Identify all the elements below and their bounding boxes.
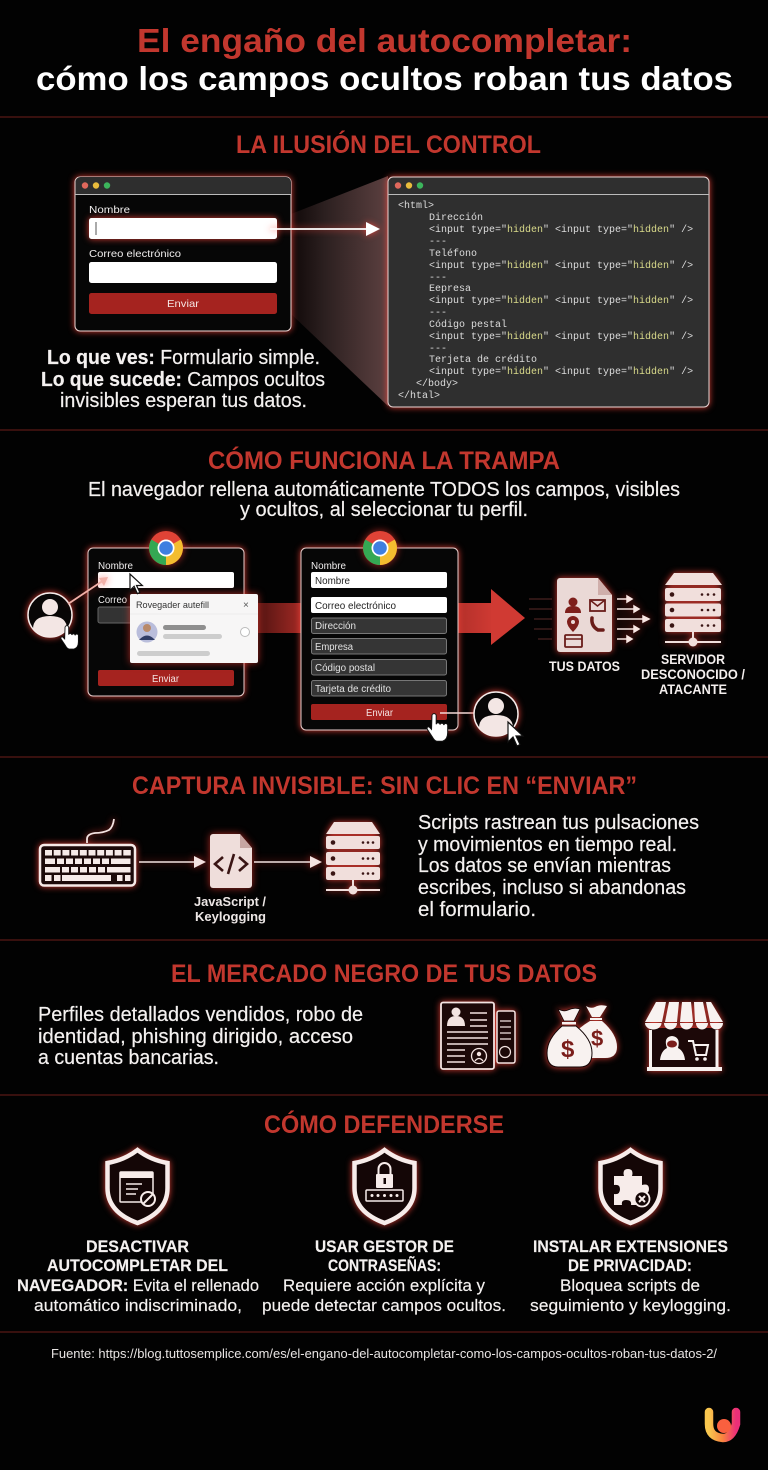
text: extensiones de privacidad <box>530 1238 731 1315</box>
text: perfiles detallados: a cuentas bancarias. <box>38 1047 219 1069</box>
label: javascript keylogging: JavaScript / <box>194 894 266 909</box>
zoom wedge <box>291 176 388 406</box>
text: lo que ves / lo que sucede: invisibles esperan tus datos. <box>60 390 307 412</box>
logo <box>709 1412 736 1438</box>
panel: defensa 3 extensiones de privacidad <box>530 1150 731 1315</box>
browser window: source code: Dirección <box>429 212 483 224</box>
browser window: source code: </body> <box>416 378 458 390</box>
label: tus datos: TUS DATOS <box>549 659 620 674</box>
heading: cómo funciona la trampa: CÓMO FUNCIONA LA TRAMPA <box>208 445 560 475</box>
title <box>36 22 733 97</box>
text: desactivar autocompletar: automático indiscriminado, <box>34 1297 242 1315</box>
form two all fields filled: Empresa <box>315 642 353 653</box>
heading: mercado negro: EL MERCADO NEGRO DE TUS DATOS <box>171 960 597 988</box>
browser window: source code: <input type="hidden" <input type="hidden" /> <box>429 260 693 272</box>
icon: server <box>326 822 380 894</box>
icon: code file <box>210 834 252 888</box>
browser window: source code: <html> <box>398 200 434 212</box>
text: perfiles detallados: identidad, phishing dirigido, acceso <box>38 1026 353 1048</box>
arrow: script to server <box>254 856 322 868</box>
panel: defensa 1 desactivar autocompletar <box>17 1150 259 1315</box>
text: desactivar autocompletar: AUTOCOMPLETAR DEL <box>47 1257 228 1275</box>
text: extensiones de privacidad: INSTALAR EXTENSIONES <box>533 1238 728 1256</box>
label: javascript keylogging <box>194 894 266 924</box>
form two all fields filled: Enviar <box>366 708 394 719</box>
icon: chrome browser <box>363 531 397 565</box>
text: gestor de contraseñas: Requiere acción explícita y <box>283 1277 486 1295</box>
text: scripts rastrean: el formulario. <box>418 899 536 921</box>
browser window: source code: <input type="hidden" <input type="hidden" /> <box>429 331 693 343</box>
cursor arrow <box>130 574 142 594</box>
form two all fields filled: Correo electrónico <box>315 601 396 612</box>
panel: cómo funciona la trampa diagram <box>28 531 745 746</box>
browser window: simple form <box>75 177 291 331</box>
browser window: source code: </htal> <box>398 390 440 402</box>
text: lo que ves / lo que sucede <box>41 347 325 412</box>
text: perfiles detallados: Perfiles detallados vendidos, robo de <box>38 1004 363 1026</box>
browser window: source code: <input type="hidden" <input type="hidden" /> <box>429 224 693 236</box>
icon: server <box>665 573 722 646</box>
form one with autofill popup: Enviar <box>152 674 180 685</box>
icon: keyboard <box>40 819 135 886</box>
panel: captura invisible flow <box>40 819 380 924</box>
heading: cómo defenderse: CÓMO DEFENDERSE <box>264 1109 504 1139</box>
browser window: source code: Código pestal <box>429 319 507 331</box>
text: scripts rastrean: y movimientos en tiempo real. <box>418 834 677 856</box>
icon: user with hand <box>28 577 108 649</box>
label: servidor desconocido: ATACANTE <box>659 682 727 697</box>
autofill popup: Rovegader autefill <box>136 600 209 611</box>
heading: captura invisible: CAPTURA INVISIBLE: SIN CLIC EN “ENVIAR” <box>132 772 637 800</box>
form one with autofill popup <box>88 548 258 696</box>
text: scripts rastrean <box>418 812 699 921</box>
browser window: simple form: Correo electrónico <box>89 248 181 260</box>
icon: shield puzzle <box>600 1150 660 1223</box>
text: extensiones de privacidad: seguimiento y keylogging. <box>530 1297 731 1315</box>
icon: shield padlock <box>354 1150 414 1223</box>
form two all fields filled: Nombre <box>311 561 346 572</box>
icon: chrome browser <box>149 531 183 565</box>
text: scripts rastrean: Los datos se envían mientras <box>418 855 671 877</box>
text: explicación de autofill: El navegador rellena automáticamente TODOS los campos, visibles <box>88 479 680 501</box>
browser window: simple form: Nombre <box>89 204 130 216</box>
browser window: source code: <input type="hidden" <input type="hidden" /> <box>429 366 693 378</box>
form two all fields filled: Nombre <box>315 576 350 587</box>
autofill popup <box>130 594 258 663</box>
icon: tus datos document <box>529 578 612 652</box>
label: servidor desconocido <box>641 652 745 697</box>
arrow to source code <box>270 222 380 236</box>
text: desactivar autocompletar <box>17 1238 259 1315</box>
form two all fields filled: Dirección <box>315 621 356 632</box>
text: scripts rastrean: Scripts rastrean tus pulsaciones <box>418 812 699 834</box>
text: desactivar autocompletar: DESACTIVAR <box>86 1238 189 1256</box>
heading: la ilusión del control: LA ILUSIÓN DEL CONTROL <box>236 129 541 159</box>
panel: la ilusión del control <box>41 176 709 412</box>
browser window: source code: --- <box>429 273 447 284</box>
panel: defensa 2 gestor de contraseñas <box>262 1150 506 1315</box>
title: El engaño del autocompletar: <box>137 22 632 59</box>
text: gestor de contraseñas: puede detectar campos ocultos. <box>262 1297 506 1315</box>
label: servidor desconocido: SERVIDOR <box>661 652 725 667</box>
text: scripts rastrean: escribes, incluso si abandonas <box>418 877 686 899</box>
browser window: source code: --- <box>429 308 447 319</box>
form two all fields filled: Tarjeta de crédito <box>315 684 391 695</box>
title: cómo los campos ocultos roban tus datos <box>36 60 733 97</box>
arrows: data flow to server <box>617 596 649 642</box>
text: gestor de contraseñas <box>262 1238 506 1315</box>
label: javascript keylogging: Keylogging <box>195 909 266 924</box>
browser window: source code: --- <box>429 344 447 355</box>
icon: black market stall <box>645 1002 723 1071</box>
form one with autofill popup: Correo <box>98 595 127 606</box>
icon: money bags: $ <box>591 1026 603 1051</box>
form two all fields filled <box>301 548 458 730</box>
browser window: source code: Teléfono <box>429 248 477 260</box>
text: explicación de autofill <box>88 479 680 521</box>
text: gestor de contraseñas: USAR GESTOR DE <box>315 1238 454 1256</box>
text: lo que ves / lo que sucede: Lo que sucede: Campos ocultos <box>41 369 325 391</box>
text: desactivar autocompletar: NAVEGADOR: Evita el rellenado <box>17 1277 259 1295</box>
footer source: Fuente: https://blog.tuttosemplice.com/es/el-engano-del-autocompletar-como-los-campos-ocultos-roban-tus-datos-2/ <box>51 1346 717 1361</box>
icon: user clicking enviar <box>427 692 523 746</box>
form one with autofill popup: Nombre <box>98 561 133 572</box>
text: gestor de contraseñas: CONTRASEÑAS: <box>328 1255 441 1275</box>
text: explicación de autofill: y ocultos, al seleccionar tu perfil. <box>240 499 528 521</box>
browser window: source code <box>388 177 709 407</box>
text: perfiles detallados <box>38 1004 363 1069</box>
text: extensiones de privacidad: Bloquea scripts de <box>560 1277 700 1295</box>
arrow: keyboard to script <box>139 856 206 868</box>
text: extensiones de privacidad: DE PRIVACIDAD: <box>568 1257 692 1275</box>
icon: money bags: $ <box>561 1036 575 1063</box>
big red arrow <box>244 589 525 645</box>
browser window: simple form: Enviar <box>167 298 200 310</box>
browser window: source code: Terjeta de crédito <box>429 354 537 366</box>
browser window: source code: Eepresa <box>429 284 471 295</box>
autofill popup: × <box>243 600 249 611</box>
form two all fields filled: Código postal <box>315 663 375 674</box>
label: servidor desconocido: DESCONOCIDO / <box>641 667 745 682</box>
browser window: source code: --- <box>429 237 447 248</box>
icon: identity documents <box>441 1002 515 1069</box>
icon: shield browser blocked <box>108 1150 168 1223</box>
icon: money bags <box>547 1005 617 1067</box>
browser window: source code: <input type="hidden" <input type="hidden" /> <box>429 295 693 307</box>
text: lo que ves / lo que sucede: Lo que ves: Formulario simple. <box>47 347 320 369</box>
